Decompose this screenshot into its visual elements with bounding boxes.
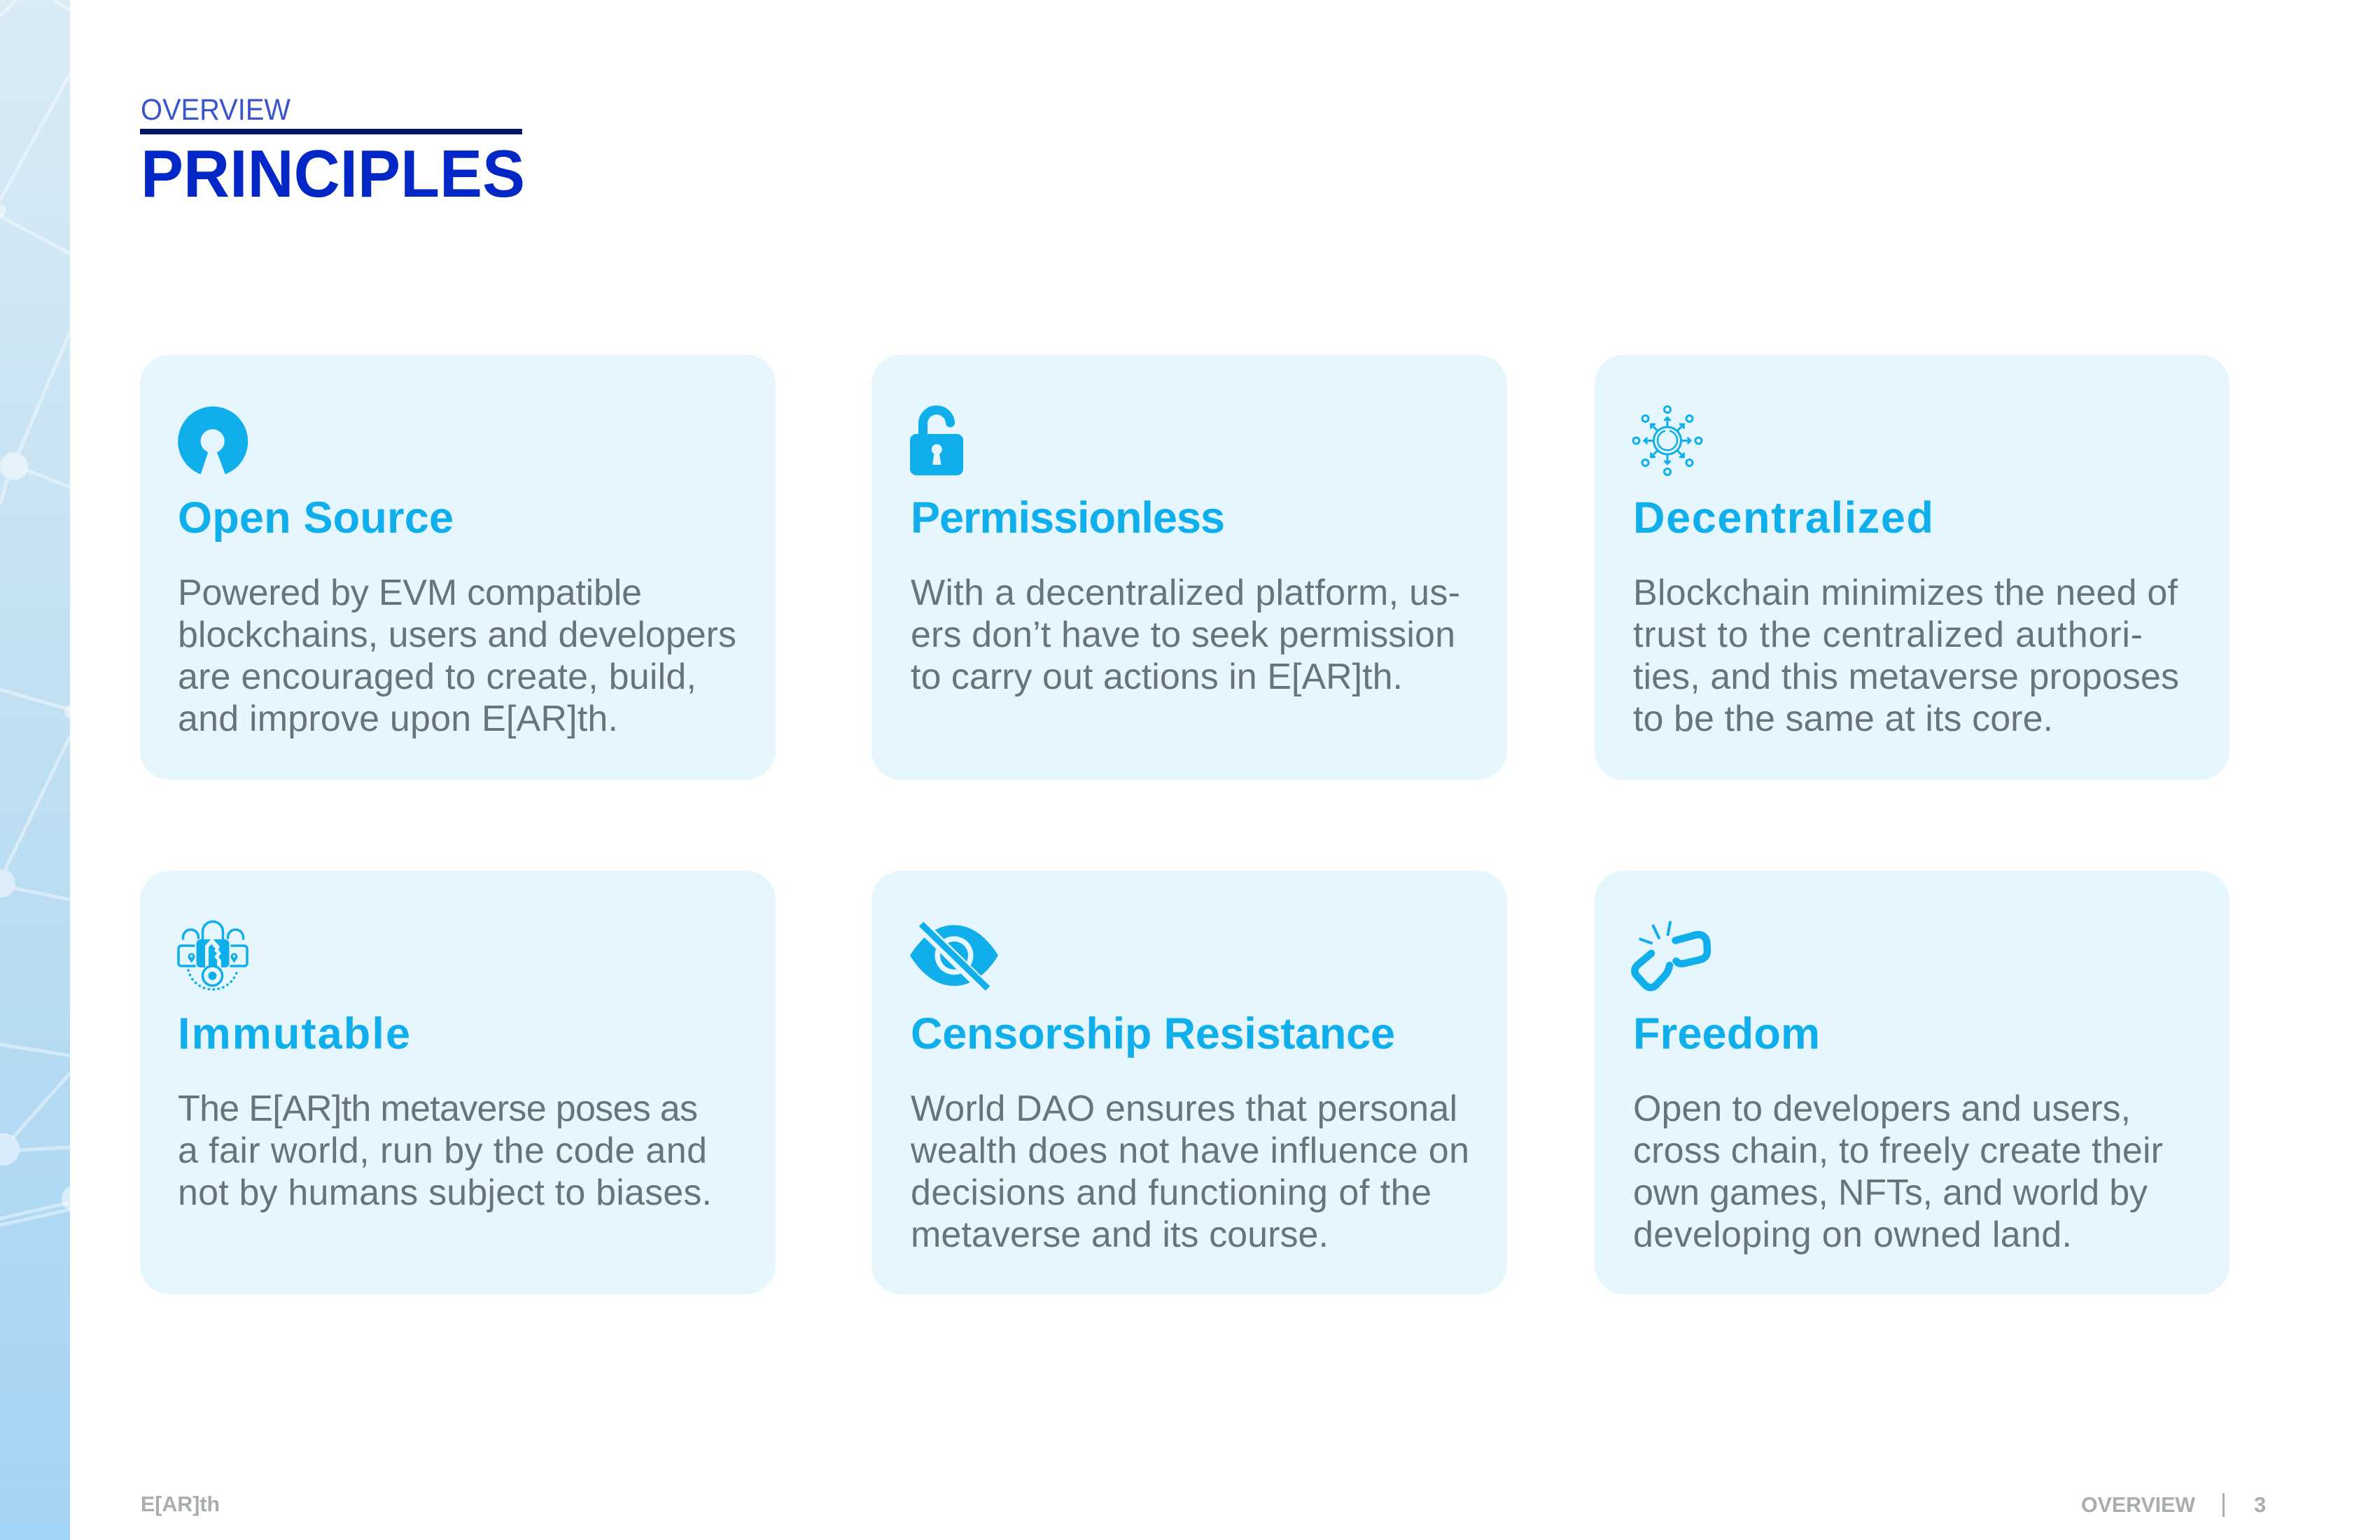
text: Permissionless description: ers don’t have to seek permission bbox=[911, 615, 1455, 655]
panel: Open Source bbox=[140, 355, 776, 780]
icon: open source keyhole bbox=[178, 407, 248, 475]
text: Censorship Resistance description: World DAO ensures that personal bbox=[911, 1088, 1457, 1129]
icon: hub with arrows and nodes bbox=[1633, 406, 1702, 475]
panel: Immutable bbox=[140, 871, 776, 1294]
panel: Censorship Resistance bbox=[872, 871, 1507, 1294]
heading: Censorship Resistance: Censorship Resistance bbox=[911, 1009, 1395, 1058]
text: Decentralized description: trust to the centralized authori- bbox=[1633, 615, 2143, 655]
text: Decentralized description: to be the same at its core. bbox=[1633, 699, 2053, 739]
text: Immutable description bbox=[178, 1088, 712, 1213]
panel: Permissionless bbox=[872, 355, 1507, 780]
text: Open Source description: blockchains, users and developers bbox=[178, 615, 736, 655]
text: Permissionless description: With a decentralized platform, us- bbox=[911, 573, 1460, 613]
text: Censorship Resistance description: metaverse and its course. bbox=[911, 1214, 1329, 1255]
heading: Open Source: Open Source bbox=[178, 493, 454, 542]
text: Immutable description: The E[AR]th metaverse poses as bbox=[178, 1088, 698, 1129]
text: Open Source description bbox=[178, 573, 736, 739]
heading: Immutable: Immutable bbox=[178, 1009, 410, 1058]
text: Open Source description: Powered by EVM compatible bbox=[178, 573, 642, 613]
footer: page number: 3 bbox=[2254, 1492, 2266, 1517]
text: Censorship Resistance description bbox=[910, 1088, 1469, 1255]
text: Immutable description: a fair world, run by the code and bbox=[178, 1130, 707, 1171]
sidebar: network pattern band bbox=[0, 0, 70, 1540]
text: Freedom description: own games, NFTs, and world by bbox=[1633, 1172, 2148, 1213]
text: Immutable description: not by humans subject to biases. bbox=[178, 1172, 712, 1213]
heading: Freedom: Freedom bbox=[1633, 1009, 1820, 1058]
section label: OVERVIEW: OVERVIEW bbox=[141, 93, 290, 127]
icon: crossed-out eye bbox=[910, 921, 998, 992]
text: Censorship Resistance description: wealth does not have influence on bbox=[910, 1130, 1469, 1171]
icon: open padlock bbox=[910, 410, 963, 475]
footer: brand name: E[AR]th bbox=[141, 1492, 220, 1516]
icon: broken chain link bbox=[1634, 923, 1707, 988]
panel: Freedom bbox=[1595, 871, 2230, 1294]
text: Freedom description: Open to developers and users, bbox=[1633, 1088, 2131, 1129]
text: Permissionless description bbox=[911, 573, 1460, 697]
text: Freedom description: cross chain, to freely create their bbox=[1633, 1130, 2163, 1171]
panel: Decentralized bbox=[1595, 355, 2230, 780]
text: Freedom description bbox=[1633, 1088, 2163, 1255]
heading: Decentralized: Decentralized bbox=[1633, 493, 1933, 542]
header rule bbox=[140, 129, 522, 134]
text: Open Source description: are encouraged to create, build, bbox=[178, 657, 696, 697]
icon: locks and key bbox=[178, 921, 247, 990]
text: Open Source description: and improve upon E[AR]th. bbox=[178, 699, 618, 739]
text: Permissionless description: to carry out actions in E[AR]th. bbox=[911, 657, 1403, 697]
title: PRINCIPLES: PRINCIPLES bbox=[141, 136, 525, 211]
text: Decentralized description: ties, and this metaverse proposes bbox=[1633, 657, 2179, 697]
text: Decentralized description bbox=[1633, 573, 2179, 739]
text: Decentralized description: Blockchain minimizes the need of bbox=[1633, 573, 2178, 613]
heading: Permissionless: Permissionless bbox=[911, 493, 1225, 542]
footer: section label: OVERVIEW bbox=[2081, 1492, 2196, 1517]
footer: divider bbox=[2222, 1493, 2225, 1517]
text: Censorship Resistance description: decisions and functioning of the bbox=[911, 1172, 1432, 1213]
text: Freedom description: developing on owned land. bbox=[1633, 1214, 2072, 1255]
